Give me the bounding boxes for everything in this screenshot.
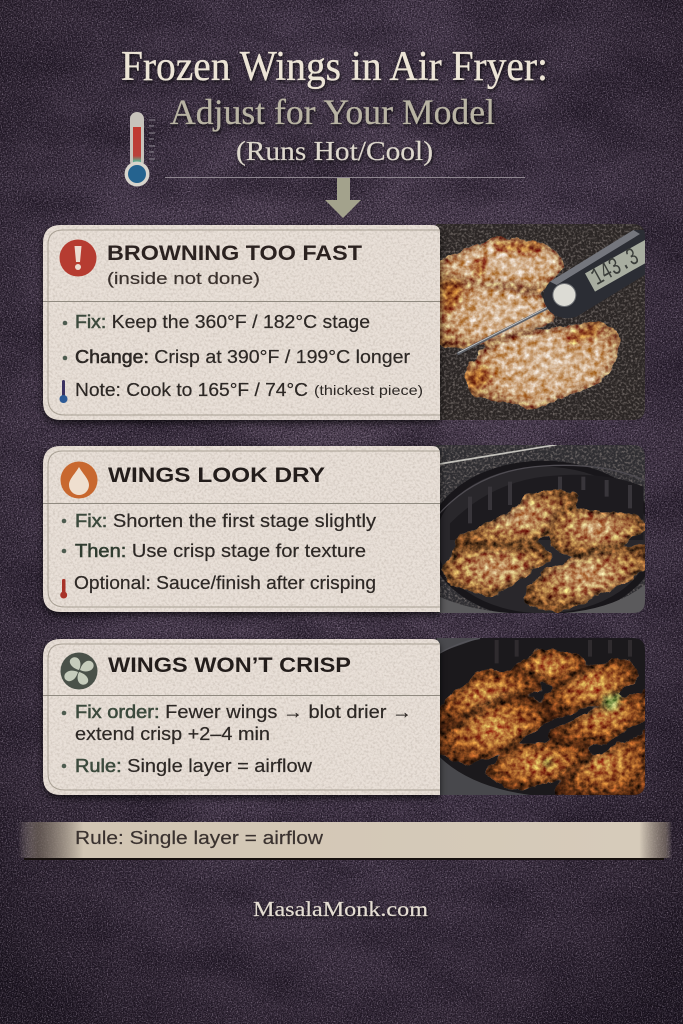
icon: water drop [60, 462, 98, 498]
thermometer body [543, 230, 650, 318]
arrow: down [325, 178, 361, 218]
title line 3: (Runs Hot/Cool) [236, 136, 433, 166]
icon: thermometer [124, 112, 155, 186]
panel: wings won't crisp [43, 639, 440, 795]
photo: crispy wings in basket [436, 638, 650, 797]
photo: wings with instant-read thermometer [436, 224, 650, 421]
bullet: then: Then: Use crisp stage for texture [75, 541, 366, 561]
bullet: note [60, 380, 423, 403]
heading: wings look dry: WINGS LOOK DRY [108, 464, 325, 487]
heading: browning too fast: BROWNING TOO FAST [107, 242, 362, 265]
callout: rule strip [18, 822, 672, 859]
photo: wings in air fryer basket [436, 445, 645, 613]
bullet: fix order: Fix order: Fewer wings → blot drier → [75, 702, 412, 722]
thermometer probe [458, 308, 547, 353]
title line 1: Frozen Wings in Air Fryer: [121, 44, 548, 90]
bullet: fix order: extend crisp +2–4 min [75, 724, 270, 744]
panel: wings look dry [43, 446, 440, 612]
bullet: fix: Fix: Shorten the first stage slightly [75, 511, 376, 531]
bullet: change: Change: Crisp at 390°F / 199°C longer [75, 347, 410, 367]
subheading: (inside not done) [107, 269, 260, 288]
bullet: fix: Fix: Keep the 360°F / 182°C stage [75, 312, 370, 332]
bullet: note: Note: Cook to 165°F / 74°C [75, 380, 308, 400]
callout: rule strip: Rule: Single layer = airflow [75, 827, 324, 848]
footer: website: MasalaMonk.com [253, 897, 428, 921]
icon: warning exclamation [60, 240, 96, 276]
heading: wings won't crisp: WINGS WON’T CRISP [108, 654, 351, 677]
icon: fan [60, 652, 98, 690]
title line 2: Adjust for Your Model [170, 92, 495, 132]
bullet: fix order [62, 702, 412, 744]
bullet: note: (thickest piece) [314, 382, 423, 398]
bullet: rule: Rule: Single layer = airflow [75, 756, 313, 776]
thermometer screen [585, 240, 645, 292]
photo: wings with instant-read thermometer: 143.3 [586, 243, 644, 292]
bullet: optional: Optional: Sauce/finish after crisping [74, 573, 376, 593]
title block [121, 44, 548, 166]
panel: browning too fast [43, 225, 440, 420]
